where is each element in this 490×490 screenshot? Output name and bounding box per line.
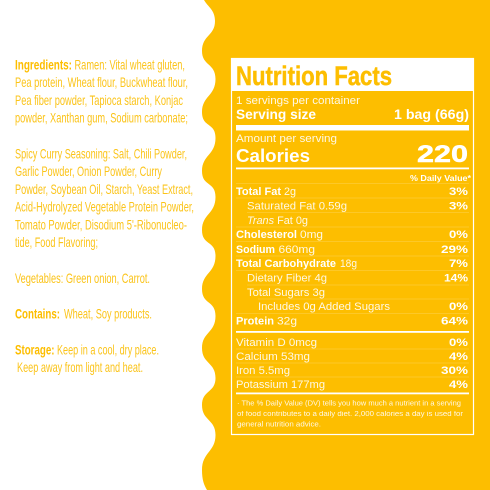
row: vitamin D: 0%: [449, 337, 468, 349]
row: total fat: 2g: [284, 186, 296, 198]
row: calcium: Calcium 53mg: [236, 351, 310, 363]
row: added sugars: 0%: [449, 301, 468, 313]
vegetables line: Vegetables: Green onion, Carrot.: [15, 271, 150, 286]
row: iron: Iron 5.5mg: [236, 365, 290, 377]
seasoning paragraph: Tomato Powder, Disodium 5'-Ribonucleo-: [15, 218, 187, 232]
panel border: [232, 58, 474, 434]
row: saturated fat: [247, 200, 468, 212]
serving information: 1 bag (66g): [394, 107, 469, 122]
heading: Nutrition Facts: Nutrition Facts: [236, 61, 392, 91]
seasoning paragraph: [15, 146, 194, 250]
row: protein: [236, 316, 468, 328]
row: sodium: 660mg: [278, 244, 315, 256]
row: iron: 30%: [441, 365, 468, 377]
row: total fat: 3%: [449, 186, 468, 198]
storage lines: Keep away from light and heat.: [17, 360, 143, 375]
footnote: general nutrition advice.: [237, 422, 321, 428]
storage lines: [15, 342, 159, 375]
calories: Calories: [236, 145, 310, 166]
row: potassium: Potassium 177mg: [236, 379, 325, 391]
footnote: · The % Daily Value (DV) tells you how much a nutrient in a serving: [237, 400, 461, 408]
row: total fat: Total Fat: [236, 186, 281, 198]
wavy yellow background panel: [202, 0, 490, 490]
serving information: 1 servings per container: [236, 95, 360, 107]
row: trans fat: Trans Fat 0g: [247, 215, 308, 227]
heading: Nutrition Facts: [231, 58, 474, 91]
contains line: Contains:: [15, 306, 60, 322]
row: total carbohydrate: 18g: [340, 258, 357, 270]
calories: [236, 133, 468, 168]
footnote: [237, 400, 464, 428]
row: sodium: [236, 244, 468, 256]
seasoning paragraph: Powder, Soybean Oil, Starch, Yeast Extract,: [15, 182, 193, 197]
seasoning paragraph: tide, Food Flavoring;: [15, 235, 98, 250]
row: protein: 32g: [277, 316, 297, 328]
row: potassium: [236, 379, 468, 391]
row: sodium: Sodium: [236, 244, 275, 256]
ingredients paragraph: Pea protein, Wheat flour, Buckwheat flour,: [15, 75, 188, 90]
row: sodium: 29%: [441, 244, 468, 256]
nutrient rows: [236, 186, 468, 328]
row: vitamin D: [236, 337, 468, 349]
row: total carbohydrate: 7%: [449, 258, 468, 270]
row: calcium: [236, 351, 468, 363]
row: dietary fiber: [247, 272, 468, 284]
serving information: Serving size: [236, 107, 316, 122]
storage lines: Storage:: [15, 342, 54, 358]
row: vitamin D: Vitamin D 0mcg: [236, 337, 317, 349]
ingredients paragraph: Ramen: Vital wheat gluten,: [74, 58, 185, 72]
row: dietary fiber: 14%: [444, 272, 468, 284]
row: cholesterol: 0%: [449, 229, 468, 241]
row: total carbohydrate: Total Carbohydrate: [236, 258, 336, 270]
ingredients paragraph: powder, Xanthan gum, Sodium carbonate;: [15, 110, 188, 126]
row: saturated fat: 3%: [449, 200, 468, 212]
row: dietary fiber: Dietary Fiber 4g: [247, 272, 327, 284]
row: total sugars: Total Sugars 3g: [247, 287, 325, 299]
row: cholesterol: Cholesterol: [236, 229, 297, 241]
calories: Amount per serving: [236, 133, 337, 145]
contains line: Wheat, Soy products.: [64, 306, 152, 322]
row: protein: Protein: [236, 316, 274, 328]
nutrition facts panel: [231, 58, 474, 434]
contains line: [15, 306, 152, 322]
storage lines: Keep in a cool, dry place.: [57, 342, 159, 358]
ingredients paragraph: [15, 58, 188, 126]
row: cholesterol: 0mg: [300, 229, 323, 241]
ingredients paragraph: Ingredients:: [15, 58, 72, 72]
vitamins and minerals rows: [236, 337, 468, 391]
row: protein: 64%: [441, 316, 468, 328]
row: added sugars: Includes 0g Added Sugars: [258, 301, 390, 313]
ingredients text block: [15, 58, 194, 375]
row: potassium: 4%: [449, 379, 468, 391]
row: calcium: 4%: [449, 351, 468, 363]
footnote: of food contributes to a daily diet. 2,000 calories a day is used for: [237, 411, 464, 418]
seasoning paragraph: Garlic Powder, Onion Powder, Curry: [15, 164, 162, 179]
row: total fat: [236, 186, 468, 198]
serving information: [236, 95, 469, 122]
row: added sugars: [258, 301, 468, 313]
calories: 220: [417, 141, 468, 168]
daily value header: % Daily Value*: [410, 174, 472, 183]
seasoning paragraph: Spicy Curry Seasoning: Salt, Chili Powder,: [15, 146, 187, 162]
row: cholesterol: [236, 229, 468, 241]
ingredients paragraph: Pea fiber powder, Tapioca starch, Konjac: [15, 93, 183, 108]
row: iron: [236, 365, 468, 377]
seasoning paragraph: Acid-Hydrolyzed Vegetable Protein Powder,: [15, 200, 194, 214]
row: saturated fat: Saturated Fat 0.59g: [247, 200, 347, 212]
row: total carbohydrate: [236, 258, 468, 270]
